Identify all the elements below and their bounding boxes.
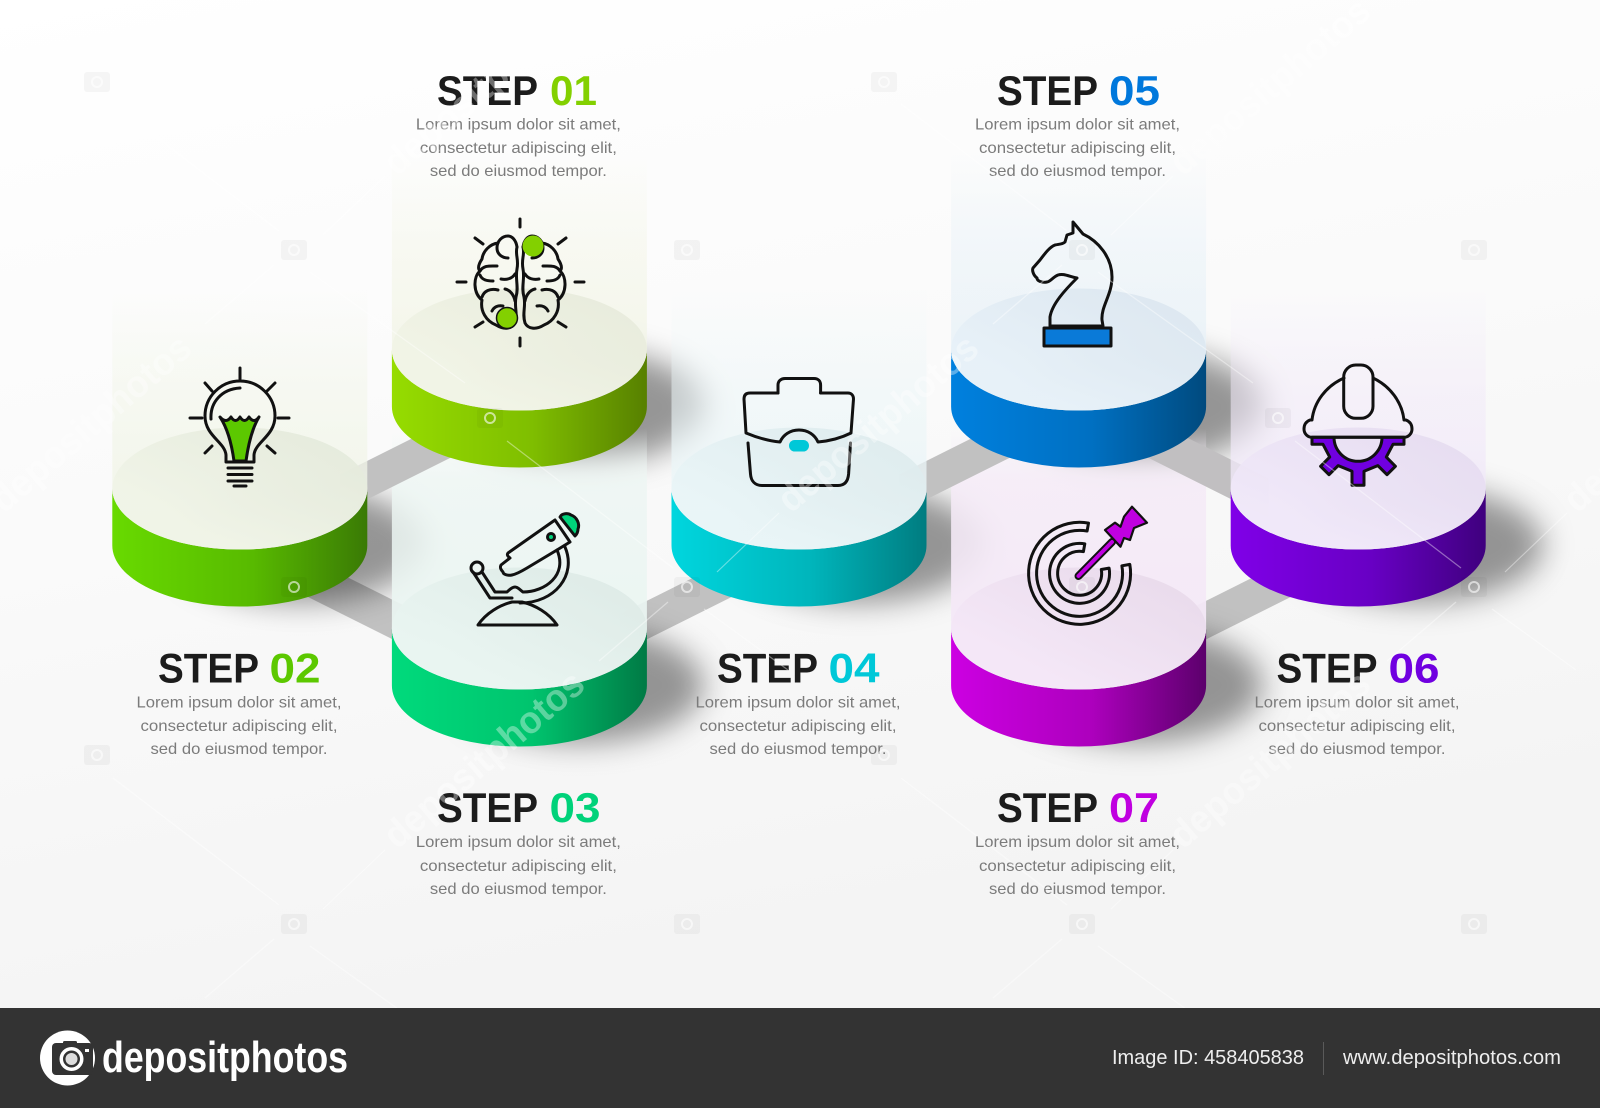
footer bar: Image ID: 458405838 xyxy=(1112,1047,1304,1069)
watermark overlay: depositphotos xyxy=(770,327,987,521)
connector: step 3 to step 4 xyxy=(620,550,750,653)
step 05 heading xyxy=(997,67,1160,114)
step 02 text: consectetur adipiscing elit, xyxy=(140,718,338,735)
icon: hard hat with gear xyxy=(1304,365,1412,485)
icon: target with arrow xyxy=(1029,507,1147,624)
connector: step 5 to step 6 xyxy=(1129,408,1269,518)
icon: light bulb xyxy=(190,368,289,486)
step 04 text: consectetur adipiscing elit, xyxy=(700,718,896,735)
step 05 text: Lorem ipsum dolor sit amet, xyxy=(975,116,1180,134)
cylinder: step 5 xyxy=(951,150,1206,468)
step 06 heading: STEP xyxy=(1276,644,1378,692)
step 01 text: Lorem ipsum dolor sit amet, xyxy=(416,116,621,134)
connector: step 2 to step 3 xyxy=(290,548,430,658)
step 06 text: Lorem ipsum dolor sit amet, xyxy=(1254,694,1460,712)
step 03 text: consectetur adipiscing elit, xyxy=(420,858,617,875)
step 01 heading: 01 xyxy=(550,67,597,114)
connector: step 4 to step 5 xyxy=(899,410,1029,513)
icon: microscope xyxy=(471,514,579,625)
step 07 heading: 07 xyxy=(1109,784,1159,831)
step 03 heading: 03 xyxy=(550,784,600,831)
cylinder: step 7 xyxy=(951,428,1206,746)
connector: step 7 to step 6 xyxy=(1179,550,1309,653)
step 02 text: Lorem ipsum dolor sit amet, xyxy=(136,694,342,712)
step 01 text: sed do eiusmod tempor. xyxy=(430,163,607,180)
step 02 text: sed do eiusmod tempor. xyxy=(150,741,328,758)
step 05 text: consectetur adipiscing elit, xyxy=(979,140,1176,157)
step 07 text: consectetur adipiscing elit, xyxy=(979,858,1176,875)
step 03 text xyxy=(416,834,621,898)
step 01 text: consectetur adipiscing elit, xyxy=(420,140,617,157)
step 07 text xyxy=(975,834,1180,898)
footer bar: depositphotos xyxy=(102,1033,348,1082)
cylinder shadows xyxy=(175,349,1543,743)
step 06 heading xyxy=(1276,644,1440,692)
cylinder: step 1 xyxy=(392,150,647,468)
cylinder: step 6 xyxy=(1231,288,1486,606)
step 04 text: sed do eiusmod tempor. xyxy=(710,741,886,758)
step 02 heading xyxy=(158,644,320,692)
step 03 text: Lorem ipsum dolor sit amet, xyxy=(416,834,621,851)
step 02 heading: STEP xyxy=(158,644,259,692)
step 06 text: consectetur adipiscing elit, xyxy=(1258,718,1456,735)
step 06 heading: 06 xyxy=(1388,644,1440,692)
step 05 heading: 05 xyxy=(1109,67,1160,114)
step 03 heading: STEP xyxy=(437,784,538,831)
icon: brain xyxy=(457,219,584,346)
step 01 text xyxy=(416,116,621,180)
step 06 text: sed do eiusmod tempor. xyxy=(1268,741,1446,758)
step 07 text: sed do eiusmod tempor. xyxy=(989,881,1166,898)
watermark overlay: depositphotos xyxy=(376,663,593,857)
step 03 heading xyxy=(437,784,600,831)
step 07 text: Lorem ipsum dolor sit amet, xyxy=(975,834,1180,851)
step 04 text: Lorem ipsum dolor sit amet, xyxy=(696,694,900,712)
step 04 heading: 04 xyxy=(828,644,880,692)
icon: chess knight xyxy=(1033,222,1112,346)
cylinder: step 2 xyxy=(112,288,367,606)
step 07 heading: STEP xyxy=(997,784,1098,831)
cylinder: step 4 xyxy=(672,288,926,606)
step 04 text xyxy=(696,694,900,758)
step 04 heading: STEP xyxy=(717,644,818,692)
step 05 heading: STEP xyxy=(997,67,1098,114)
step 05 text: sed do eiusmod tempor. xyxy=(989,163,1166,180)
step 05 text xyxy=(975,116,1180,180)
step 02 text xyxy=(136,694,342,758)
cylinder: step 3 xyxy=(392,428,647,746)
icon: briefcase xyxy=(744,378,854,486)
step 03 text: sed do eiusmod tempor. xyxy=(430,881,607,898)
watermark overlay: depositphotos xyxy=(1162,663,1379,857)
step 06 text xyxy=(1254,694,1460,758)
step 04 heading xyxy=(717,644,880,692)
step 01 heading: STEP xyxy=(437,67,538,114)
step 01 heading xyxy=(437,67,597,114)
step 07 heading xyxy=(997,784,1159,831)
footer bar: www.depositphotos.com xyxy=(1342,1047,1561,1069)
footer bar xyxy=(0,1008,1600,1108)
connector: step 2 to step 1 xyxy=(340,410,470,513)
step 02 heading: 02 xyxy=(270,644,320,692)
